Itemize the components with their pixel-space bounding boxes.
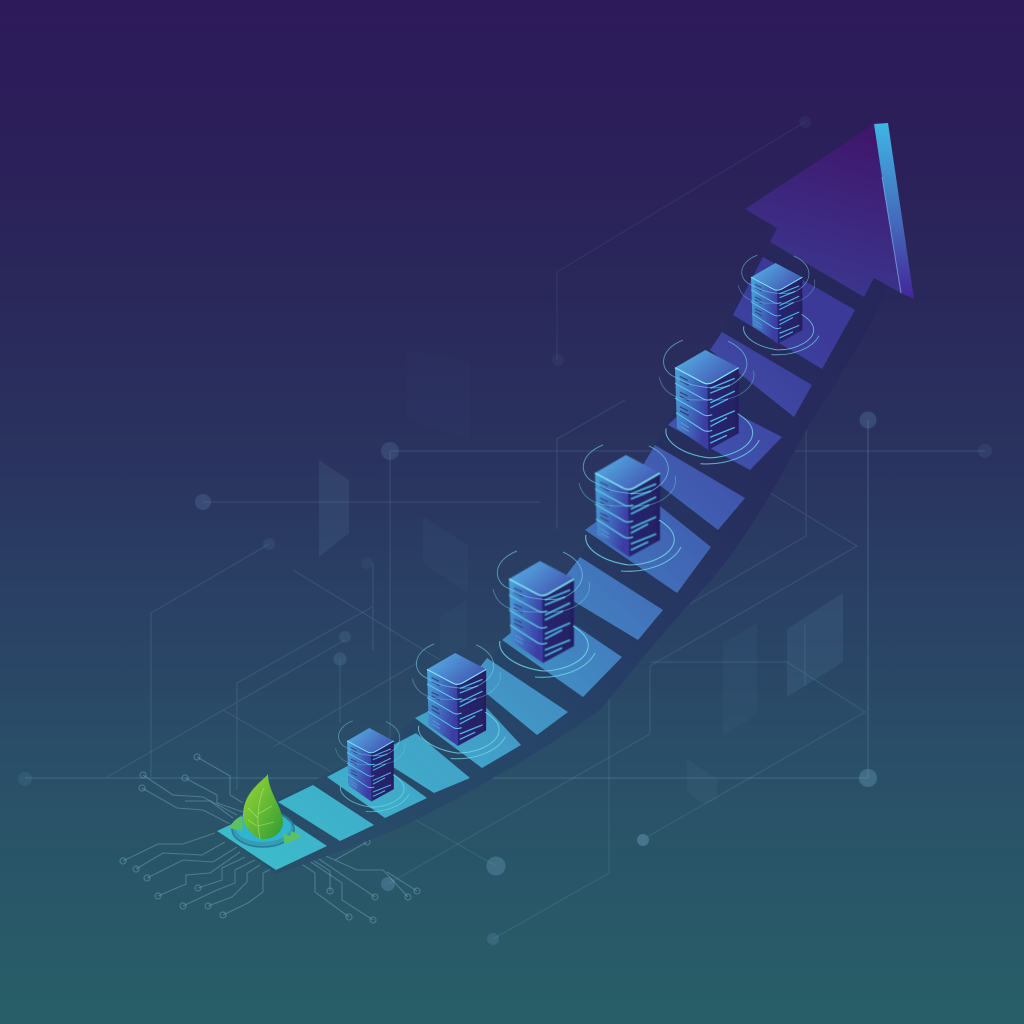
tile 10	[640, 445, 745, 530]
network path: centre horizontal	[390, 451, 985, 740]
network path: right vertical and base line	[25, 420, 868, 778]
network path: centre hexagon	[388, 400, 857, 884]
translucent background panels	[319, 350, 843, 804]
tile: server 2	[415, 690, 521, 768]
ring arrow left	[229, 816, 243, 830]
leaf icon	[229, 774, 302, 847]
tile 8	[555, 557, 663, 640]
recycle ring	[232, 811, 294, 847]
server stack 6	[738, 255, 819, 355]
tile: leaf base	[217, 807, 327, 870]
tile: server 1	[327, 755, 427, 818]
stepping tiles	[217, 257, 855, 870]
network path: top right	[557, 122, 805, 360]
tile: server 3	[502, 605, 622, 697]
tile: server 5	[668, 395, 782, 470]
network path: lower right	[493, 625, 865, 939]
tile: server 4	[585, 490, 711, 593]
server stack 4	[579, 445, 681, 571]
server stack 5	[659, 340, 759, 464]
circuit board traces	[120, 754, 420, 923]
server stack 2	[412, 644, 505, 759]
network path: mid left	[107, 563, 373, 790]
arrow shaft dark band	[217, 242, 888, 874]
arrow head	[745, 123, 914, 299]
leaf veins	[248, 788, 274, 839]
ring arrow right	[283, 831, 302, 843]
arrow head bright edge	[874, 123, 914, 299]
server stack 3	[493, 551, 595, 677]
background network lines	[25, 122, 985, 939]
network path: left horizontal	[203, 501, 540, 503]
tile 12	[710, 332, 812, 417]
arrow head body	[745, 124, 901, 297]
tile 2	[278, 785, 374, 841]
tile: server 6	[733, 257, 855, 369]
network path: left hexagon	[151, 544, 269, 777]
tile 6	[470, 658, 568, 735]
network nodes	[18, 116, 992, 945]
tile 4	[374, 733, 470, 793]
server stack 1	[335, 721, 409, 812]
leaf blade	[243, 774, 283, 839]
arrow head highlight line	[882, 177, 901, 293]
network path: diagonals	[223, 570, 496, 866]
